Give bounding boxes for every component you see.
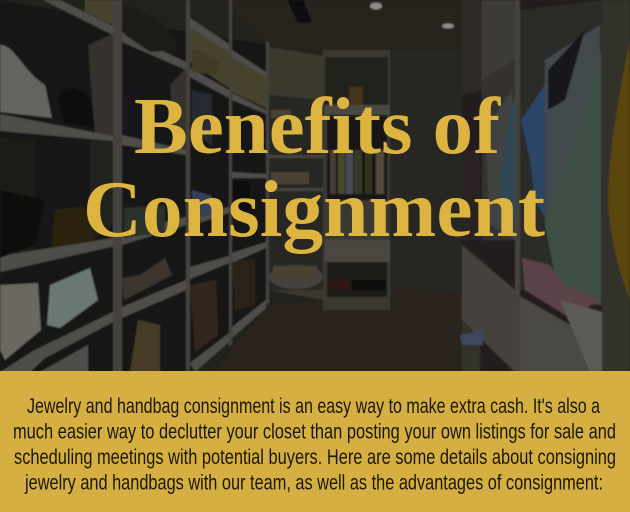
floor [215, 288, 468, 372]
ceiling vent [287, 0, 312, 23]
right shelving with hanging clothes [460, 0, 630, 372]
left shelving unit [0, 0, 269, 372]
far-right post and yellow garment [602, 0, 630, 372]
ceiling [228, 0, 470, 55]
hanging garments [485, 90, 515, 240]
pale upper cubby backs [85, 0, 266, 108]
center alcove with shoe carousel [269, 47, 390, 310]
title: Consignment [83, 164, 545, 254]
white drawers [462, 245, 515, 372]
recessed ceiling lights [370, 2, 454, 28]
vertical uprights [113, 0, 269, 372]
panel: closet photo background [0, 0, 630, 372]
folded clothes [522, 258, 600, 318]
shelf boards [0, 0, 266, 372]
gold text panel [0, 371, 630, 512]
title: Benefits of [134, 81, 501, 171]
upper cubby side panels [0, 34, 186, 270]
title [83, 81, 545, 254]
handbags on shelves [0, 3, 255, 372]
back wall and door [388, 50, 464, 295]
intro paragraph [13, 395, 616, 494]
